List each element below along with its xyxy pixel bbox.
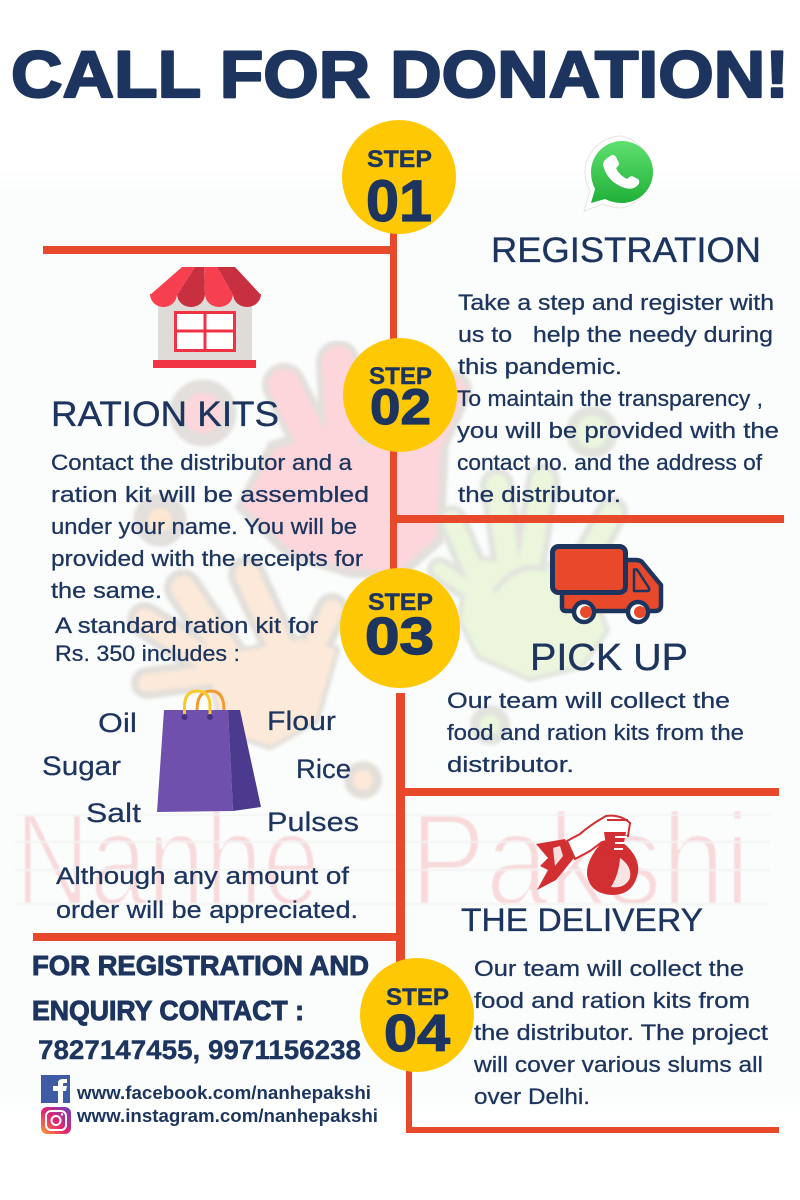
icon: truck [552, 546, 661, 622]
step 03 badge: STEP [368, 589, 433, 616]
step 02 badge [343, 338, 457, 452]
text: registration: contact no. and the address of [457, 450, 763, 475]
icon: whatsapp [584, 136, 653, 211]
timeline connectors [33, 230, 784, 1133]
ration kit items: Flour [267, 706, 336, 736]
text: ration kits: under your name. You will be [51, 514, 357, 539]
text: registration: To maintain the transparency , [457, 386, 763, 411]
icon: hand holding sack [536, 816, 638, 895]
text: the delivery: food and ration kits from [474, 988, 750, 1013]
watermark: ruled lines [15, 815, 770, 904]
icon: instagram [41, 1107, 71, 1134]
text: pick up: food and ration kits from the [447, 720, 744, 745]
watermark: logo wordmark [15, 786, 750, 933]
text: pick up: distributor. [447, 752, 574, 777]
step 03 badge: 03 [365, 608, 434, 666]
ration kit items: Sugar [42, 751, 121, 781]
contact numbers: 7827147455, 9971156238 [38, 1035, 361, 1065]
heading: pick up: PICK UP [530, 637, 688, 679]
text: instagram url: www.instagram.com/nanhepakshi [76, 1105, 378, 1126]
text: ration kits: the same. [51, 578, 162, 603]
step 01 badge: 01 [366, 169, 432, 234]
ration kit items: Oil [98, 708, 137, 738]
text: any amount: Although any amount of [56, 863, 349, 890]
ration kit items: Pulses [267, 807, 359, 837]
icon: shopping bag [157, 691, 261, 812]
text: kit price: Rs. 350 includes : [55, 641, 240, 666]
watermark: orange hand [145, 575, 382, 799]
step 03 badge [340, 568, 460, 688]
watermark: green hand [440, 406, 618, 745]
contact heading: FOR REGISTRATION AND [32, 950, 369, 981]
watermark: logo wordmark: Pakshi [410, 786, 750, 933]
watermark: pink hand [138, 362, 452, 575]
text: kit price [55, 613, 319, 666]
text: ration kits [51, 450, 369, 603]
watermark: logo wordmark: Nanhe [15, 786, 320, 933]
text: registration: Take a step and register with [458, 290, 774, 315]
step 01 badge: STEP [367, 146, 432, 173]
step 01 badge [342, 120, 456, 234]
text: facebook url: www.facebook.com/nanhepakshi [76, 1082, 371, 1103]
text: registration: the distributor. [458, 482, 621, 507]
contact heading: ENQUIRY CONTACT : [32, 995, 304, 1026]
text: pick up [447, 688, 744, 777]
text: ration kits: provided with the receipts for [51, 546, 364, 571]
text: any amount: order will be appreciated. [56, 897, 358, 924]
text: ration kits: Contact the distributor and a [51, 450, 353, 475]
icon: facebook [41, 1075, 70, 1103]
text: the delivery: the distributor. The project [474, 1020, 769, 1045]
text: the delivery: will cover various slums all [473, 1052, 763, 1077]
heading: the delivery: THE DELIVERY [461, 902, 703, 938]
text: registration: you will be provided with the [457, 418, 779, 443]
text: registration: us to help the needy during [458, 322, 773, 347]
ration kit items: Salt [86, 798, 142, 828]
contact heading [32, 950, 369, 1026]
heading: ration kits: RATION KITS [51, 395, 279, 434]
step 02 badge: 02 [370, 379, 431, 435]
icon: store [150, 267, 261, 368]
text: the delivery: Our team will collect the [474, 956, 744, 981]
step 04 badge: STEP [386, 984, 449, 1011]
watermark logo [0, 178, 800, 1108]
text: pick up: Our team will collect the [447, 688, 730, 713]
text: registration [457, 290, 779, 507]
text: the delivery [473, 956, 769, 1109]
step 04 badge: 04 [384, 1005, 450, 1063]
step 04 badge [360, 958, 474, 1072]
text: the delivery: over Delhi. [474, 1084, 590, 1109]
text: ration kits: ration kit will be assembled [51, 482, 369, 507]
text: kit price: A standard ration kit for [55, 613, 319, 638]
text: any amount [56, 863, 358, 924]
step 02 badge: STEP [369, 363, 432, 390]
title: CALL FOR DONATION! [11, 37, 789, 111]
ration kit items: Rice [296, 754, 351, 784]
heading: registration: REGISTRATION [491, 231, 761, 270]
text: registration: this pandemic. [458, 354, 622, 379]
ration kit items [42, 706, 359, 837]
